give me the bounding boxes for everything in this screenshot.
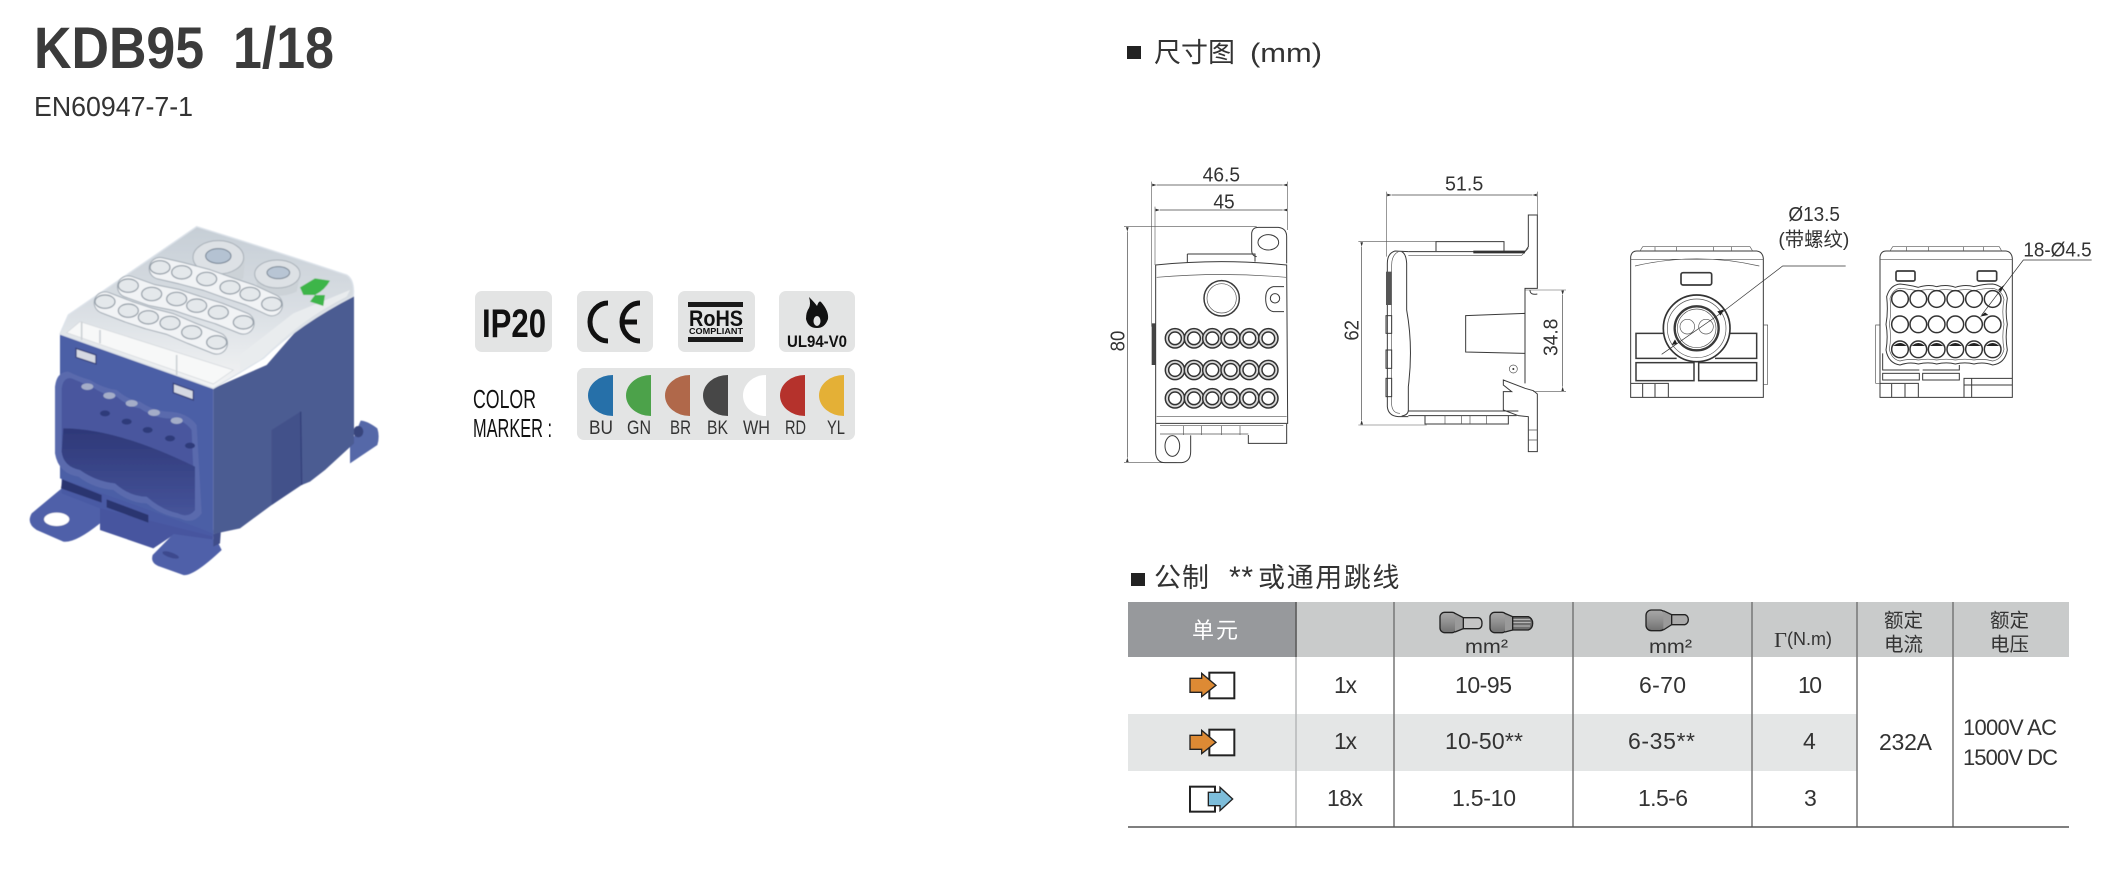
product image: blue distribution block [30,227,379,575]
front mounting ear [152,534,222,575]
side recess [272,412,301,505]
blue marker [588,375,613,439]
heading: dimensions: (mm) [1250,38,1322,68]
leader arrows [1980,285,2004,317]
heading: metric [1131,561,1401,594]
badge: RoHS compliant [678,291,755,352]
badge: RoHS compliant: RoHS [689,306,743,331]
black marker [703,375,728,439]
icon: blue output arrow [1190,787,1233,812]
column lines [1128,602,2069,827]
big terminal stud [193,241,245,285]
rated voltage value [1963,715,2058,770]
base block under front [100,500,213,548]
badge: UL94-V0 flame [779,291,855,352]
torque header [1774,628,1832,652]
label diameter 13.5: Ø13.5 [1788,204,1840,226]
specification table [1128,602,2069,827]
red marker [780,375,806,439]
side recess highlight [301,412,302,485]
clear cover [60,227,354,388]
header row background [1128,602,2069,657]
rated voltage value: 1500V DC [1963,745,2058,770]
row 1: 1x [1334,672,1358,698]
hole cluster middle row [118,279,253,329]
dimension drawing: front view [1107,164,1288,463]
badge: IP20 [475,291,552,352]
badge: UL94-V0 flame: UL94-V0 [787,332,847,351]
rated voltage header [1990,610,2029,656]
diameter leader [1982,260,2092,315]
row 3: 3 [1804,785,1817,811]
small stud body [255,275,300,296]
rail clip under side [213,513,242,547]
yellow marker [819,375,845,439]
heading: dimensions: 尺寸图 [1154,38,1235,68]
hole row top [81,383,183,424]
rated voltage header: 额定 [1990,610,2029,632]
brown marker [665,375,691,439]
base slot two [107,499,148,523]
small stud hole [267,267,290,279]
clip right [173,383,193,400]
red marker: RD [785,418,806,439]
side profile [1386,215,1537,452]
ferrule icon: solid [1440,612,1482,633]
rated voltage value: 1000V AC [1963,715,2057,740]
unit mm2 solid: mm² [1465,637,1508,658]
dimension drawing: wire entry view [1876,240,2092,397]
dimension 80: 80 [1107,331,1129,351]
small terminal stud [255,260,300,296]
label thread: (带螺纹) [1778,229,1849,251]
heading: dimensions [1127,38,1322,68]
color marker label: COLOR [473,384,536,414]
unit header cell: 单元 [1192,618,1238,643]
rated current header [1884,610,1923,656]
dimension 46.5: 46.5 [1203,164,1240,186]
cover right clear side [240,290,350,371]
rear view outline [1631,247,1768,397]
black marker: BK [707,418,728,439]
green marker [626,375,651,439]
dimension 45: 45 [1213,191,1235,213]
color marker label [473,384,552,443]
dimension 34.8: 34.8 [1540,319,1562,356]
base slot one [61,479,102,503]
wire view outline [1876,247,2012,397]
opening interior [62,378,195,515]
standard subtitle: EN60947-7-1 [34,91,193,122]
heading: metric: ** [1229,561,1253,594]
icon: orange input arrow [1190,730,1234,755]
dimension lines [1124,182,1288,463]
ferrule icon: sleeve [1646,610,1688,631]
rated voltage header: 电压 [1990,634,2029,656]
threaded hole [1663,295,1730,362]
hole cluster front row [95,295,227,349]
rated current header: 额定 [1884,610,1923,632]
white marker [743,375,770,439]
front wavy opening rim [55,372,202,521]
row 2: 6-35** [1628,728,1695,754]
base front strip [62,478,213,537]
cover front rib [82,322,177,375]
torque header: Γ [1774,628,1787,652]
color marker label: MARKER : [473,413,552,443]
row 2 [1190,728,1816,755]
row 2: 1x [1334,728,1358,754]
row 3 [1190,785,1817,812]
row 2: 10-50** [1445,728,1523,754]
icon: orange input arrow [1190,673,1234,698]
heading: metric: 公制 [1154,563,1210,593]
dimension drawing: rear view with thread [1631,204,1849,397]
label 18 holes diameter: 18-Ø4.5 [2023,240,2092,262]
badge: CE mark [577,291,653,352]
yellow marker: YL [827,418,845,439]
title: KDB95 1/18 [34,16,334,81]
row 3: 18x [1327,785,1364,811]
terminal holes [1165,329,1278,408]
green marker: GN [627,418,651,439]
unit mm2 sleeve: mm² [1649,637,1692,658]
upper contact holes [81,383,195,449]
color marker panel [577,368,855,440]
lower row dark arcs [1893,343,1999,346]
stud rim [193,241,244,274]
row 3: 1.5-6 [1638,785,1688,811]
dimension drawing: side view [1341,174,1566,452]
ferrule icon: stranded [1490,612,1533,633]
left mounting ear [30,488,100,542]
stud thread hole [206,249,231,263]
stud body [193,258,245,285]
white marker: WH [743,418,770,439]
back right mounting ear [350,421,379,463]
badge: IP20: IP20 [482,302,546,346]
small stud rim [255,260,300,288]
blue marker: BU [589,418,613,439]
front wall [60,333,213,534]
row 2: 4 [1803,728,1816,754]
rated current value: 232A [1879,729,1933,755]
green marker [300,278,330,306]
row 1: 10-95 [1455,672,1512,698]
brown marker: BR [670,418,691,439]
body outline [1152,227,1288,463]
leader arrows [1672,309,1724,345]
terminal holes [1892,291,2001,358]
left ear hole [44,513,69,526]
badge: RoHS compliant: COMPLIANT [689,326,744,336]
wavy terminal surround [1886,284,2007,365]
unit header cell [1128,602,1296,657]
row 1 [1190,672,1822,698]
thread leader [1662,266,1846,354]
torque header: (N.m) [1787,629,1832,649]
rear slot of ear [353,426,363,437]
row 3: 1.5-10 [1452,785,1516,811]
dimension 51.5: 51.5 [1445,174,1483,196]
hole cluster back row [150,261,282,311]
dimension 62: 62 [1341,320,1363,341]
clip left [76,348,96,364]
row 1: 6-70 [1639,672,1686,698]
zebra row [1128,714,1857,771]
heading: metric: 或通用跳线 [1258,563,1401,593]
dimension lines [1358,192,1566,425]
row 1: 10 [1798,672,1822,698]
side wall [213,295,354,534]
front ear slot [162,550,180,560]
cover front lower band [67,322,233,384]
hole row middle [100,410,195,449]
rated current header: 电流 [1884,634,1923,656]
opening floor [62,428,195,515]
